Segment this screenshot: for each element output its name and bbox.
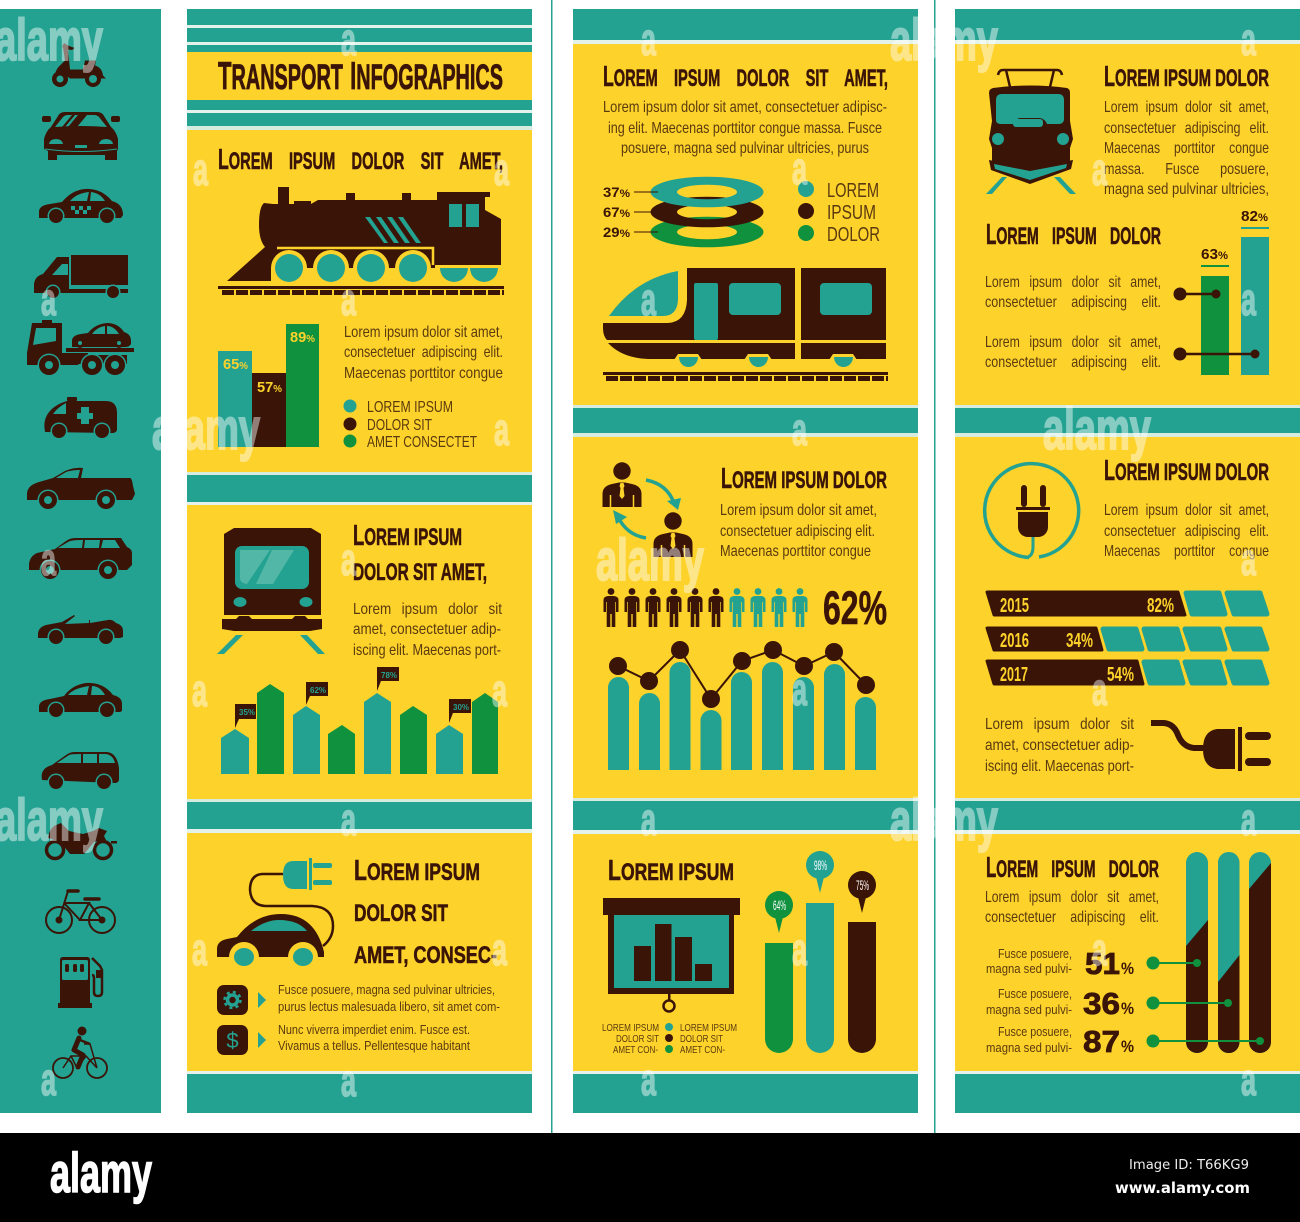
icon: subway front	[217, 528, 325, 654]
panel: subway and house bars	[187, 505, 532, 799]
watermarks: a	[641, 274, 657, 325]
text block: Vivamus a tellus. Pellentesque habitant	[278, 1038, 470, 1053]
watermarks: a	[41, 274, 57, 325]
icon: scooter	[52, 43, 106, 87]
column 2 top band	[573, 9, 918, 44]
watermarks: a	[1092, 664, 1108, 715]
text block: consectetuer adipiscing elit.	[985, 909, 1159, 926]
bar chart: 65 57 89: 89%	[290, 329, 315, 346]
watermarks: a	[1241, 14, 1257, 65]
icon: taxi	[39, 189, 123, 224]
heading: LOREM IPSUM DOLOR SIT AMET,	[603, 61, 888, 93]
icon: bicycle	[46, 891, 115, 933]
icon: electric train front	[986, 70, 1076, 194]
text block	[985, 274, 1161, 371]
watermarks: alamy	[152, 397, 260, 462]
legend: AMET CON-	[680, 1045, 725, 1056]
panel: electric car	[187, 833, 532, 1071]
heading: LOREM IPSUM	[608, 855, 734, 887]
legend: DOLOR SIT	[680, 1034, 723, 1045]
chart: progress bars: 2017	[1000, 664, 1028, 686]
watermarks: a	[792, 143, 808, 194]
flag labels: 78%	[381, 671, 397, 680]
watermarks: alamy	[596, 528, 704, 593]
text block: Lorem ipsum dolor sit amet,	[985, 334, 1161, 351]
text block: Lorem ipsum dolor sit amet, consectetuer adipisc-	[603, 99, 887, 116]
bar chart: 65 57 89: 65%	[223, 356, 248, 373]
icon: bullet train	[603, 268, 888, 378]
panel: vehicle icon sidebar	[0, 9, 161, 1113]
icon: tow truck	[27, 320, 134, 376]
legend: LOREM IPSUM	[680, 1023, 737, 1034]
title: TRANSPORT INFOGRAPHICS	[218, 55, 503, 98]
watermarks: a	[641, 1054, 657, 1105]
icon: gear badge	[217, 985, 266, 1015]
pictogram: people 62 percent	[604, 581, 887, 634]
text block	[353, 601, 502, 659]
icon: plug	[1151, 723, 1271, 771]
flag labels: 62%	[310, 686, 326, 695]
legend: LOREM	[827, 180, 879, 202]
panel: plug and progress bars	[955, 437, 1300, 798]
divider band	[573, 405, 918, 437]
text block: iscing elit. Maecenas port-	[353, 642, 501, 659]
heading line 2: DOLOR SIT	[354, 900, 448, 927]
stats list: %	[1121, 1037, 1134, 1056]
watermarks: a	[792, 924, 808, 975]
watermarks: a	[41, 1054, 57, 1105]
text block: Maecenas porttitor congue	[720, 543, 871, 560]
icon: sedan	[39, 683, 122, 718]
divider band	[187, 799, 532, 834]
text block: ing elit. Maecenas porttitor congue massa. Fusce	[608, 120, 882, 137]
watermarks: a	[341, 1055, 357, 1106]
text block: amet, consectetuer adip-	[985, 737, 1134, 754]
text block: Lorem ipsum dolor sit amet,	[720, 502, 877, 519]
text block: Lorem ipsum dolor sit	[353, 601, 502, 618]
chart: tubes with pins: 64%	[773, 897, 786, 913]
text block: Lorem ipsum dolor sit	[985, 716, 1134, 733]
icon: delivery truck	[34, 255, 128, 300]
stats list: 36	[1083, 986, 1120, 1021]
chart: progress bars: 2015	[1000, 595, 1029, 617]
divider band	[955, 405, 1300, 437]
watermarks: a	[1241, 274, 1257, 325]
legend: AMET CONSECTET	[367, 434, 477, 451]
icon: car front	[42, 112, 120, 160]
stats list: %	[1121, 999, 1134, 1018]
icon: ambulance	[44, 397, 117, 440]
icon: steam locomotive	[218, 187, 504, 292]
text block	[1104, 502, 1269, 560]
watermarks: a	[341, 794, 357, 845]
chart: progress bars: 34%	[1066, 630, 1093, 652]
watermarks: a	[1092, 924, 1108, 975]
chart: tubes with pins: 98%	[814, 857, 827, 873]
watermarks: a	[641, 794, 657, 845]
footer band	[573, 1071, 918, 1113]
stats list: magna sed pulvi-	[986, 961, 1072, 976]
heading: LOREM IPSUM	[354, 855, 480, 887]
panel: electric train and bars	[955, 44, 1300, 405]
chart: bars with connectors: 63%	[1201, 246, 1228, 263]
watermarks: a	[792, 664, 808, 715]
icon: projector screen chart	[603, 898, 740, 1012]
text block	[985, 716, 1134, 775]
text block: Lorem ipsum dolor sit amet,	[344, 324, 503, 341]
watermarks: a	[492, 665, 508, 716]
stats list: Fusce posuere,	[998, 986, 1072, 1001]
watermarks: a	[1241, 794, 1257, 845]
text block: consectetuer adipiscing elit.	[985, 294, 1161, 311]
legend: DOLOR SIT	[616, 1034, 659, 1045]
chart: stacked disks: 37%	[603, 184, 630, 200]
text block: Nunc viverra imperdiet enim. Fusce est.	[278, 1022, 470, 1037]
legend: LOREM IPSUM	[367, 399, 453, 416]
chart: bars with connectors	[1174, 208, 1269, 375]
heading: LOREM IPSUM DOLOR	[986, 219, 1161, 251]
chart: bars with connectors: 82%	[1241, 208, 1268, 225]
icon: cyclist	[53, 1026, 107, 1078]
footer: stock photo bar	[0, 1133, 1300, 1222]
text block: amet, consectetuer adip-	[353, 621, 501, 638]
watermarks: a	[641, 14, 657, 65]
icon: plug in circle	[985, 464, 1079, 558]
stats list: Fusce posuere,	[998, 946, 1072, 961]
chart: bars with line	[608, 641, 876, 770]
divider band	[573, 798, 918, 834]
chart: house bars	[221, 667, 498, 774]
chart: progress bars	[987, 592, 1267, 686]
stats list: 51	[1085, 946, 1120, 981]
column dividers	[551, 0, 936, 1133]
icon: people exchange	[602, 462, 692, 557]
panel: diagonal bars	[955, 834, 1300, 1071]
divider band	[187, 472, 532, 505]
pictogram: people 62 percent: 62%	[823, 581, 887, 634]
icon: convertible	[38, 615, 123, 646]
stats list	[986, 946, 1134, 1059]
watermarks: a	[193, 144, 209, 195]
bar chart: 65 57 89	[218, 324, 319, 447]
chart: diagonal split bars	[1146, 852, 1271, 1053]
watermarks: a	[341, 534, 357, 585]
flag labels: 35%	[239, 708, 255, 717]
panel: bullet train and disks	[573, 44, 918, 405]
icon: fuel pump	[58, 957, 102, 1008]
panel: projector and tubes	[573, 834, 918, 1071]
text block	[278, 982, 500, 1053]
divider band	[955, 798, 1300, 834]
watermarks: a	[192, 924, 208, 975]
panel: locomotive and bar chart	[187, 130, 532, 472]
icon: dollar badge: $	[226, 1028, 239, 1053]
footer band	[187, 1071, 532, 1113]
icon: motorbike	[46, 823, 117, 858]
heading: LOREM IPSUM DOLOR	[721, 463, 887, 495]
icon: dollar badge	[217, 1025, 266, 1055]
panel: people and line over bars	[573, 437, 918, 798]
text block	[1104, 99, 1269, 198]
text block: consectetuer adipiscing elit.	[344, 344, 503, 361]
text block: Fusce posuere, magna sed pulvinar ultricies,	[278, 982, 495, 997]
watermarks: alamy	[1043, 397, 1151, 462]
legend: DOLOR SIT	[367, 417, 432, 434]
bar chart: 65 57 89: 57%	[257, 379, 282, 396]
icon: minivan	[42, 752, 119, 790]
panel: column 1 header stripes	[187, 9, 532, 130]
watermarks: a	[341, 274, 357, 325]
chart: tubes with pins	[765, 851, 876, 1053]
legend: IPSUM	[827, 202, 876, 224]
text block: Lorem ipsum dolor sit amet,	[985, 274, 1161, 291]
heading line 3: AMET, CONSEC-	[354, 942, 497, 969]
watermarks: a	[1241, 1054, 1257, 1105]
chart: stacked disks	[603, 177, 764, 247]
text block: Lorem ipsum dolor sit amet,	[985, 889, 1159, 906]
stats list: Fusce posuere,	[998, 1024, 1072, 1039]
chart: tubes with pins: 75%	[856, 877, 869, 893]
text block: Maecenas porttitor congue	[344, 365, 503, 382]
watermarks: alamy	[890, 788, 998, 853]
legend: AMET CON-	[613, 1045, 658, 1056]
icon: station wagon	[29, 538, 132, 580]
stats list: magna sed pulvi-	[986, 1002, 1072, 1017]
legend	[602, 1023, 737, 1056]
stats list: magna sed pulvi-	[986, 1040, 1072, 1055]
flag labels: 30%	[453, 703, 469, 712]
text block: purus lectus malesuada libero, sit amet com-	[278, 999, 500, 1014]
website: www.alamy.com	[1115, 1179, 1250, 1197]
stats list: %	[1121, 959, 1134, 978]
footer band	[955, 1071, 1300, 1113]
legend: LOREM IPSUM	[602, 1023, 659, 1034]
watermarks: a	[1092, 144, 1108, 195]
watermarks: a	[341, 14, 357, 65]
icon: pickup	[27, 468, 135, 510]
chart: progress bars: 2016	[1000, 630, 1029, 652]
text block: posuere, magna sed pulvinar ultricies, purus	[621, 140, 869, 157]
column 3 top band	[955, 9, 1300, 44]
watermarks: a	[492, 924, 508, 975]
heading line 2: DOLOR SIT AMET,	[353, 559, 487, 586]
chart: stacked disks: 29%	[603, 224, 630, 240]
watermarks: alamy	[890, 8, 998, 73]
chart: progress bars: 54%	[1107, 664, 1134, 686]
watermarks: a	[494, 144, 510, 195]
stats list: 87	[1083, 1024, 1120, 1059]
chart: stacked disks: 67%	[603, 204, 630, 220]
image id: Image ID: T66KG9	[1129, 1157, 1249, 1173]
watermarks: a	[1241, 534, 1257, 585]
text block	[603, 99, 887, 157]
icon: electric car with plug	[217, 858, 333, 972]
text block: consectetuer adipiscing elit.	[985, 354, 1161, 371]
heading: LOREM IPSUM	[353, 520, 462, 552]
text block	[720, 502, 877, 560]
footer logo: alamy	[50, 1141, 152, 1204]
watermarks: a	[192, 665, 208, 716]
legend	[798, 180, 880, 246]
text block	[344, 324, 503, 382]
text block: consectetuer adipiscing elit.	[720, 523, 875, 540]
chart: progress bars: 82%	[1147, 595, 1174, 617]
watermarks: a	[792, 404, 808, 455]
text block: iscing elit. Maecenas port-	[985, 758, 1134, 775]
heading: LOREM IPSUM DOLOR SIT AMET,	[218, 144, 503, 176]
legend: DOLOR	[827, 224, 880, 246]
text block	[985, 889, 1159, 926]
watermarks: a	[41, 534, 57, 585]
watermarks: a	[494, 404, 510, 455]
heading: LOREM IPSUM DOLOR	[986, 852, 1159, 884]
legend	[344, 399, 477, 451]
flag labels	[235, 667, 471, 728]
